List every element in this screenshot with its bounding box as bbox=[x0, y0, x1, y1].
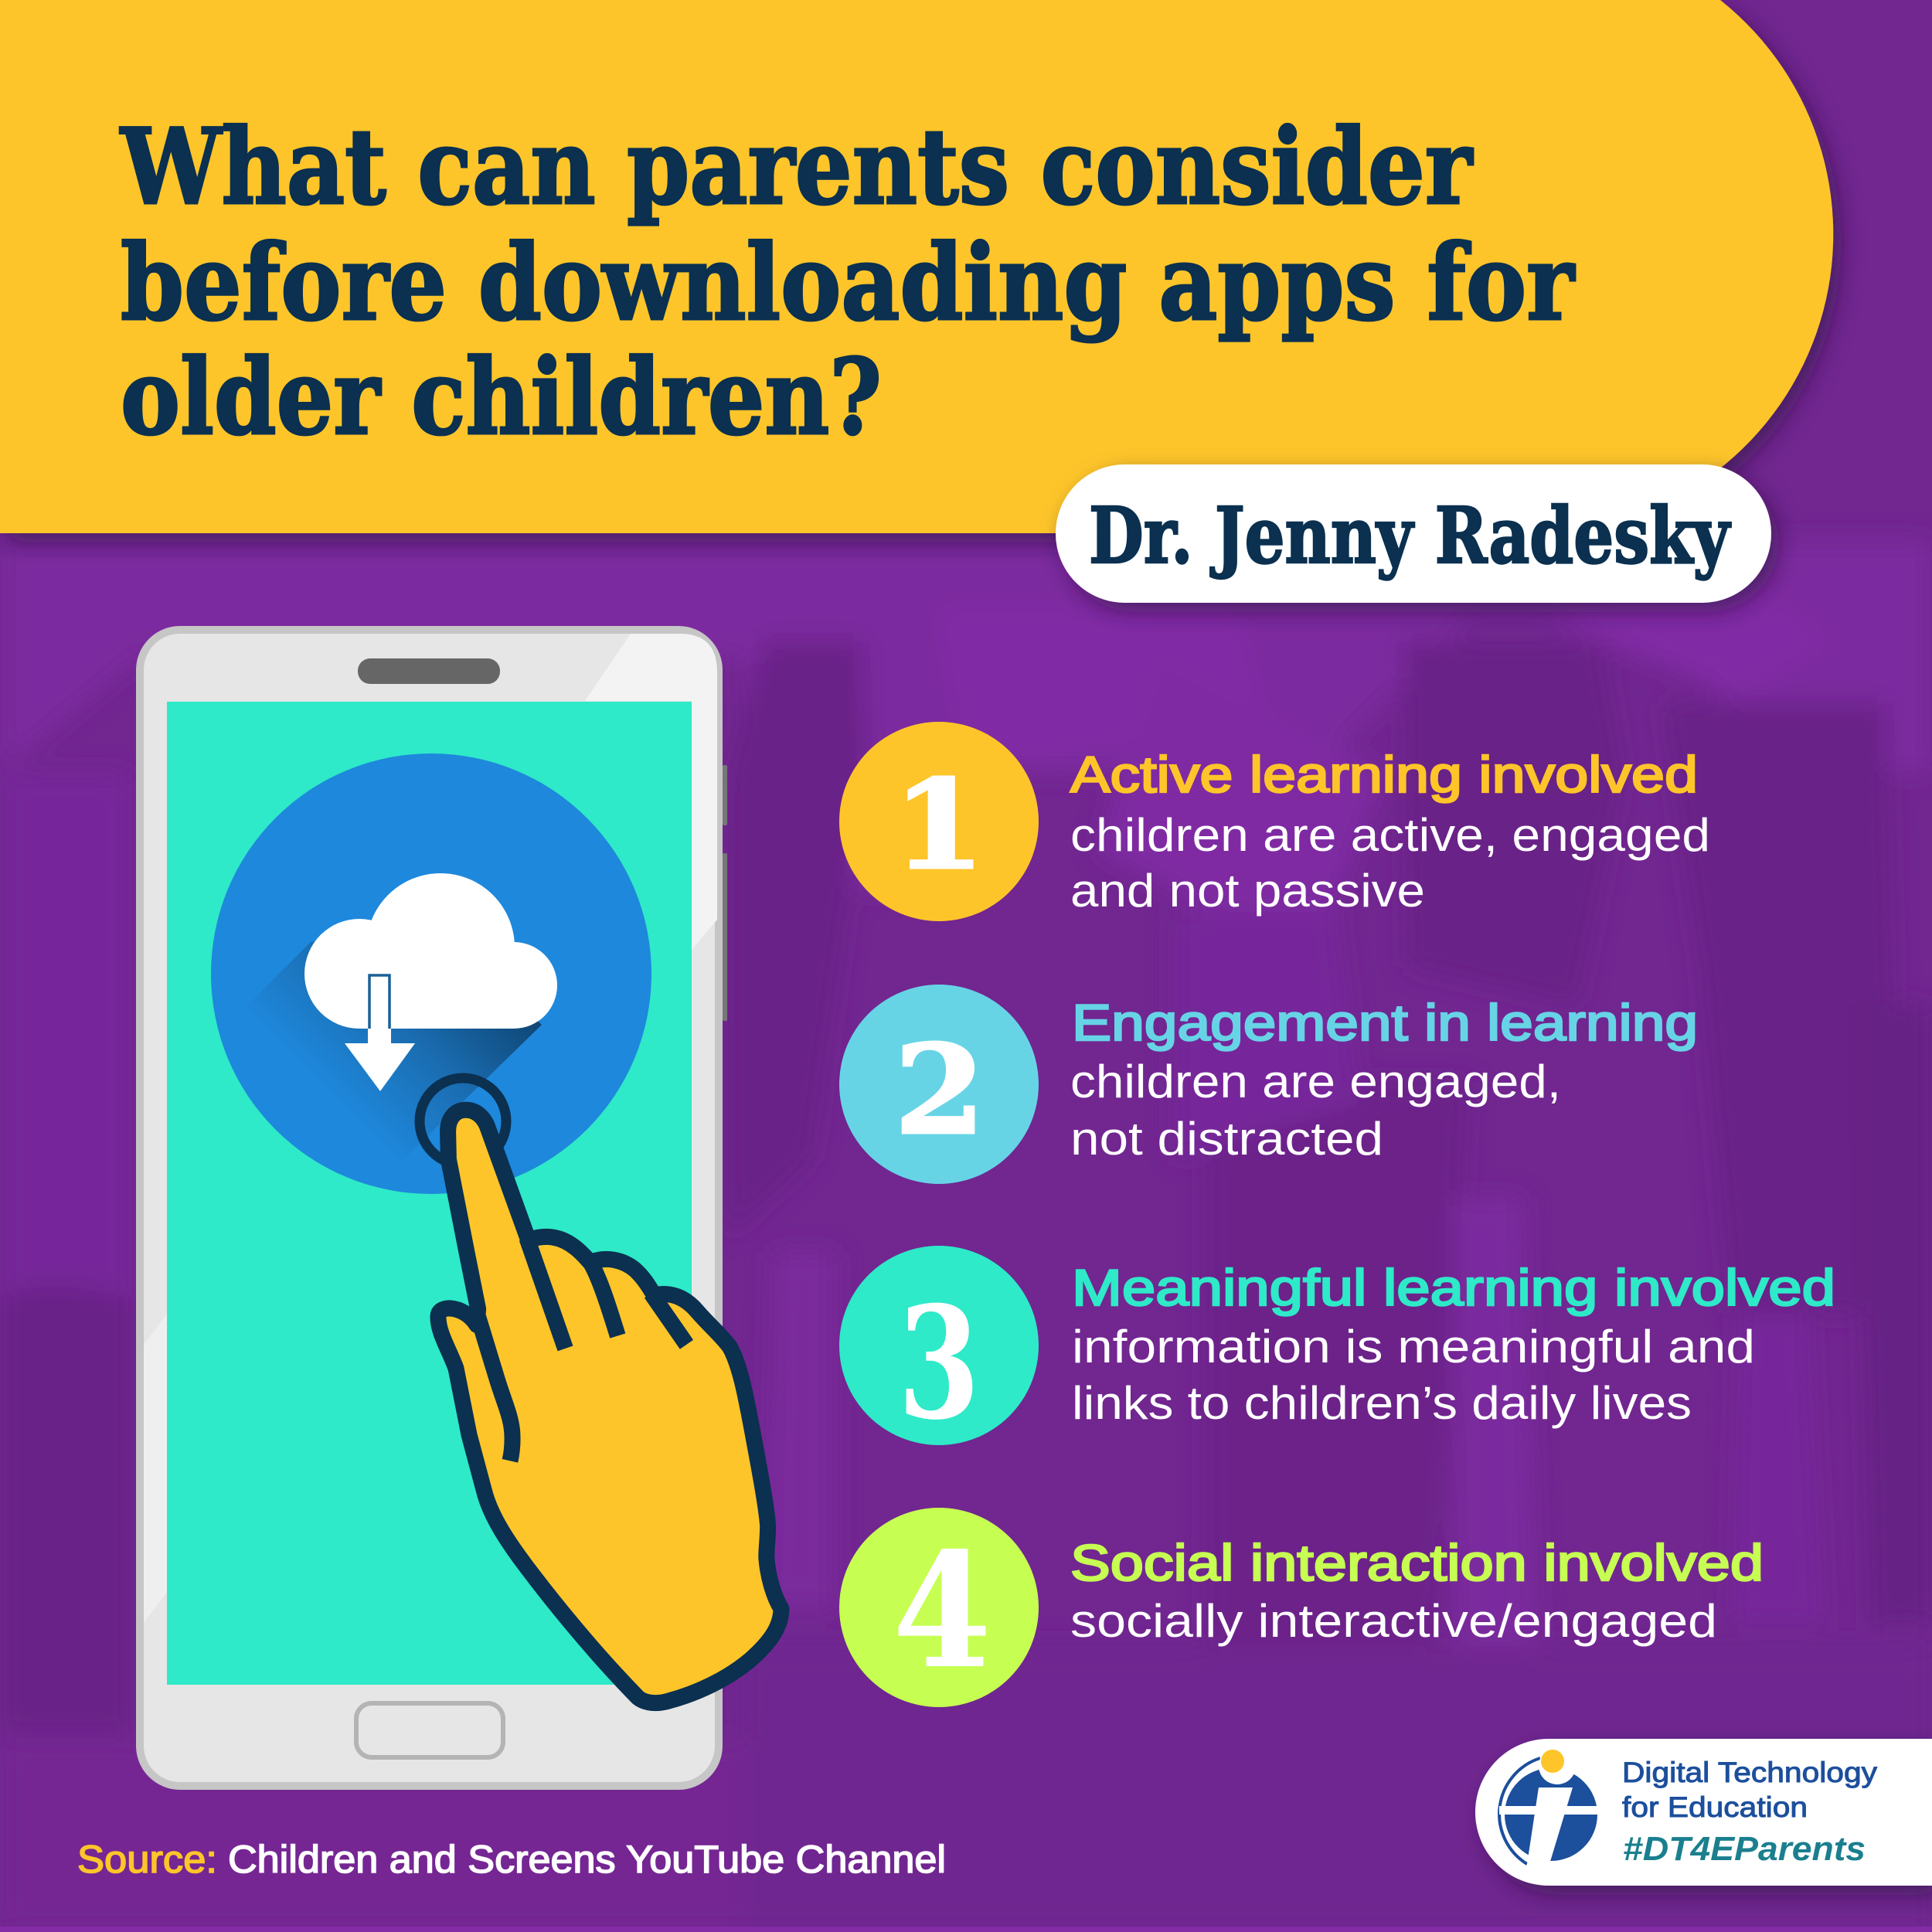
phone screen bbox=[167, 702, 692, 1685]
logo icon bbox=[1499, 1747, 1600, 1864]
title: What can parents consider bbox=[119, 105, 1474, 228]
item 2: engagement in learning: not distracted bbox=[1070, 1113, 1383, 1165]
item 1: active learning: Active learning involved bbox=[1070, 746, 1698, 803]
item 1: active learning: 1 bbox=[893, 753, 985, 897]
speaker bbox=[358, 658, 500, 684]
source line: Children and Screens YouTube Channel bbox=[228, 1838, 946, 1881]
item 3: meaningful learning: information is meaningful and bbox=[1072, 1321, 1755, 1372]
item 2: engagement in learning: 2 bbox=[894, 1019, 985, 1162]
icon: pointing hand bbox=[438, 1110, 781, 1703]
logo text: for Education bbox=[1622, 1791, 1808, 1823]
download arrow bbox=[368, 974, 391, 1043]
item 4: social interaction bbox=[839, 1508, 1764, 1707]
source line: Source: bbox=[77, 1838, 217, 1881]
cloud bbox=[304, 873, 557, 1029]
item 3: meaningful learning: 3 bbox=[898, 1273, 980, 1454]
title: before downloading apps for bbox=[121, 221, 1576, 344]
presenter name pill bbox=[1056, 464, 1771, 603]
icon: cloud download button bbox=[211, 753, 651, 1194]
home button bbox=[356, 1703, 503, 1757]
item 1: active learning bbox=[839, 722, 1710, 921]
item 2: engagement in learning bbox=[839, 985, 1698, 1184]
item 1: active learning: and not passive bbox=[1070, 865, 1425, 917]
item 4: social interaction: socially interactive/engaged bbox=[1070, 1595, 1717, 1647]
phone illustration bbox=[140, 630, 727, 1786]
item 4: social interaction: 4 bbox=[893, 1519, 992, 1704]
item 2: engagement in learning: children are engaged, bbox=[1070, 1056, 1561, 1107]
touch ring bbox=[420, 1078, 506, 1165]
item 1: active learning: children are active, engaged bbox=[1070, 809, 1710, 861]
item 3: meaningful learning bbox=[839, 1246, 1835, 1454]
logo text: #DT4EParents bbox=[1623, 1830, 1866, 1868]
title: older children? bbox=[121, 335, 882, 458]
item 3: meaningful learning: links to children’s daily lives bbox=[1072, 1377, 1692, 1429]
item 2: engagement in learning: Engagement in learning bbox=[1072, 994, 1698, 1051]
logo text: Digital Technology bbox=[1622, 1757, 1878, 1788]
item 3: meaningful learning: Meaningful learning involved bbox=[1072, 1259, 1835, 1316]
header: yellow banner bbox=[0, 0, 1833, 533]
long shadow bbox=[219, 941, 542, 1187]
presenter name pill: Dr. Jenny Radesky bbox=[1089, 490, 1731, 581]
item 4: social interaction: Social interaction involved bbox=[1070, 1534, 1764, 1591]
logo text bbox=[1622, 1757, 1878, 1868]
title bbox=[119, 105, 1576, 458]
logo panel bbox=[1475, 1739, 1932, 1886]
